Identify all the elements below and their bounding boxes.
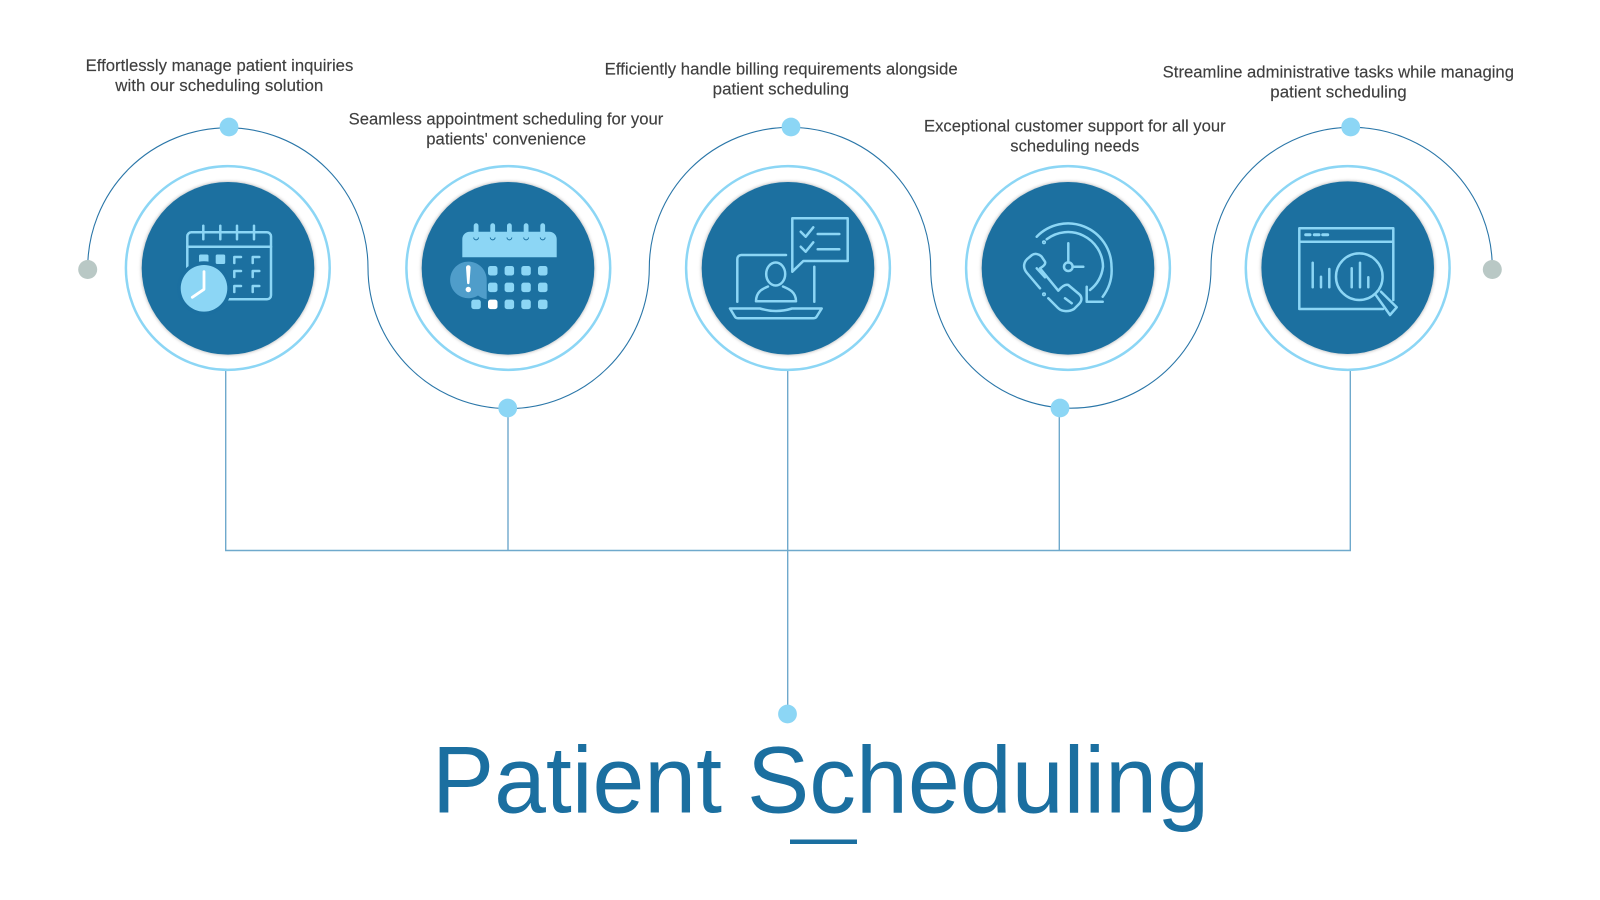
circle 4 (966, 166, 1170, 370)
circle 2 (406, 166, 610, 370)
start node (78, 260, 97, 279)
caption 5 (1163, 64, 1514, 102)
caption 4: Exceptional customer support for all your (924, 118, 1226, 136)
caption 3 (605, 60, 958, 98)
caption 4 (924, 118, 1226, 156)
node 2 (498, 399, 517, 417)
connector lines (226, 371, 1350, 708)
caption 2 (349, 110, 664, 148)
icon: browser with analytics magnifier (1299, 228, 1397, 315)
caption 4: scheduling needs (1010, 138, 1139, 156)
title: Patient (432, 728, 722, 834)
icon: calendar with clock (177, 226, 271, 315)
caption 3: Efficiently handle billing requirements alongside (605, 60, 958, 78)
caption 1: Effortlessly manage patient inquiries (86, 57, 353, 75)
node 5 (1341, 118, 1360, 136)
caption 3: patient scheduling (713, 80, 849, 98)
icon: phone with clock (1024, 223, 1112, 311)
circle 5 (1246, 166, 1450, 370)
icon: calendar with alert (450, 223, 557, 309)
caption 5: Streamline administrative tasks while managing (1163, 64, 1514, 82)
caption 2: Seamless appointment scheduling for your (349, 110, 664, 128)
title (432, 728, 1209, 834)
node 1 (220, 118, 238, 136)
caption 5: patient scheduling (1270, 84, 1407, 102)
caption 1: with our scheduling solution (114, 77, 323, 95)
node 3 (782, 118, 800, 136)
caption 2: patients' convenience (426, 130, 586, 148)
icon: laptop with chat checklist (730, 218, 848, 318)
title: Scheduling (747, 728, 1209, 834)
circle 1 (126, 166, 330, 370)
title node (778, 705, 797, 723)
title underline (790, 840, 857, 844)
end node (1483, 260, 1502, 279)
circle 3 (686, 166, 890, 370)
serpentine timeline path (88, 127, 1492, 409)
node 4 (1051, 399, 1069, 417)
caption 1 (86, 57, 353, 95)
